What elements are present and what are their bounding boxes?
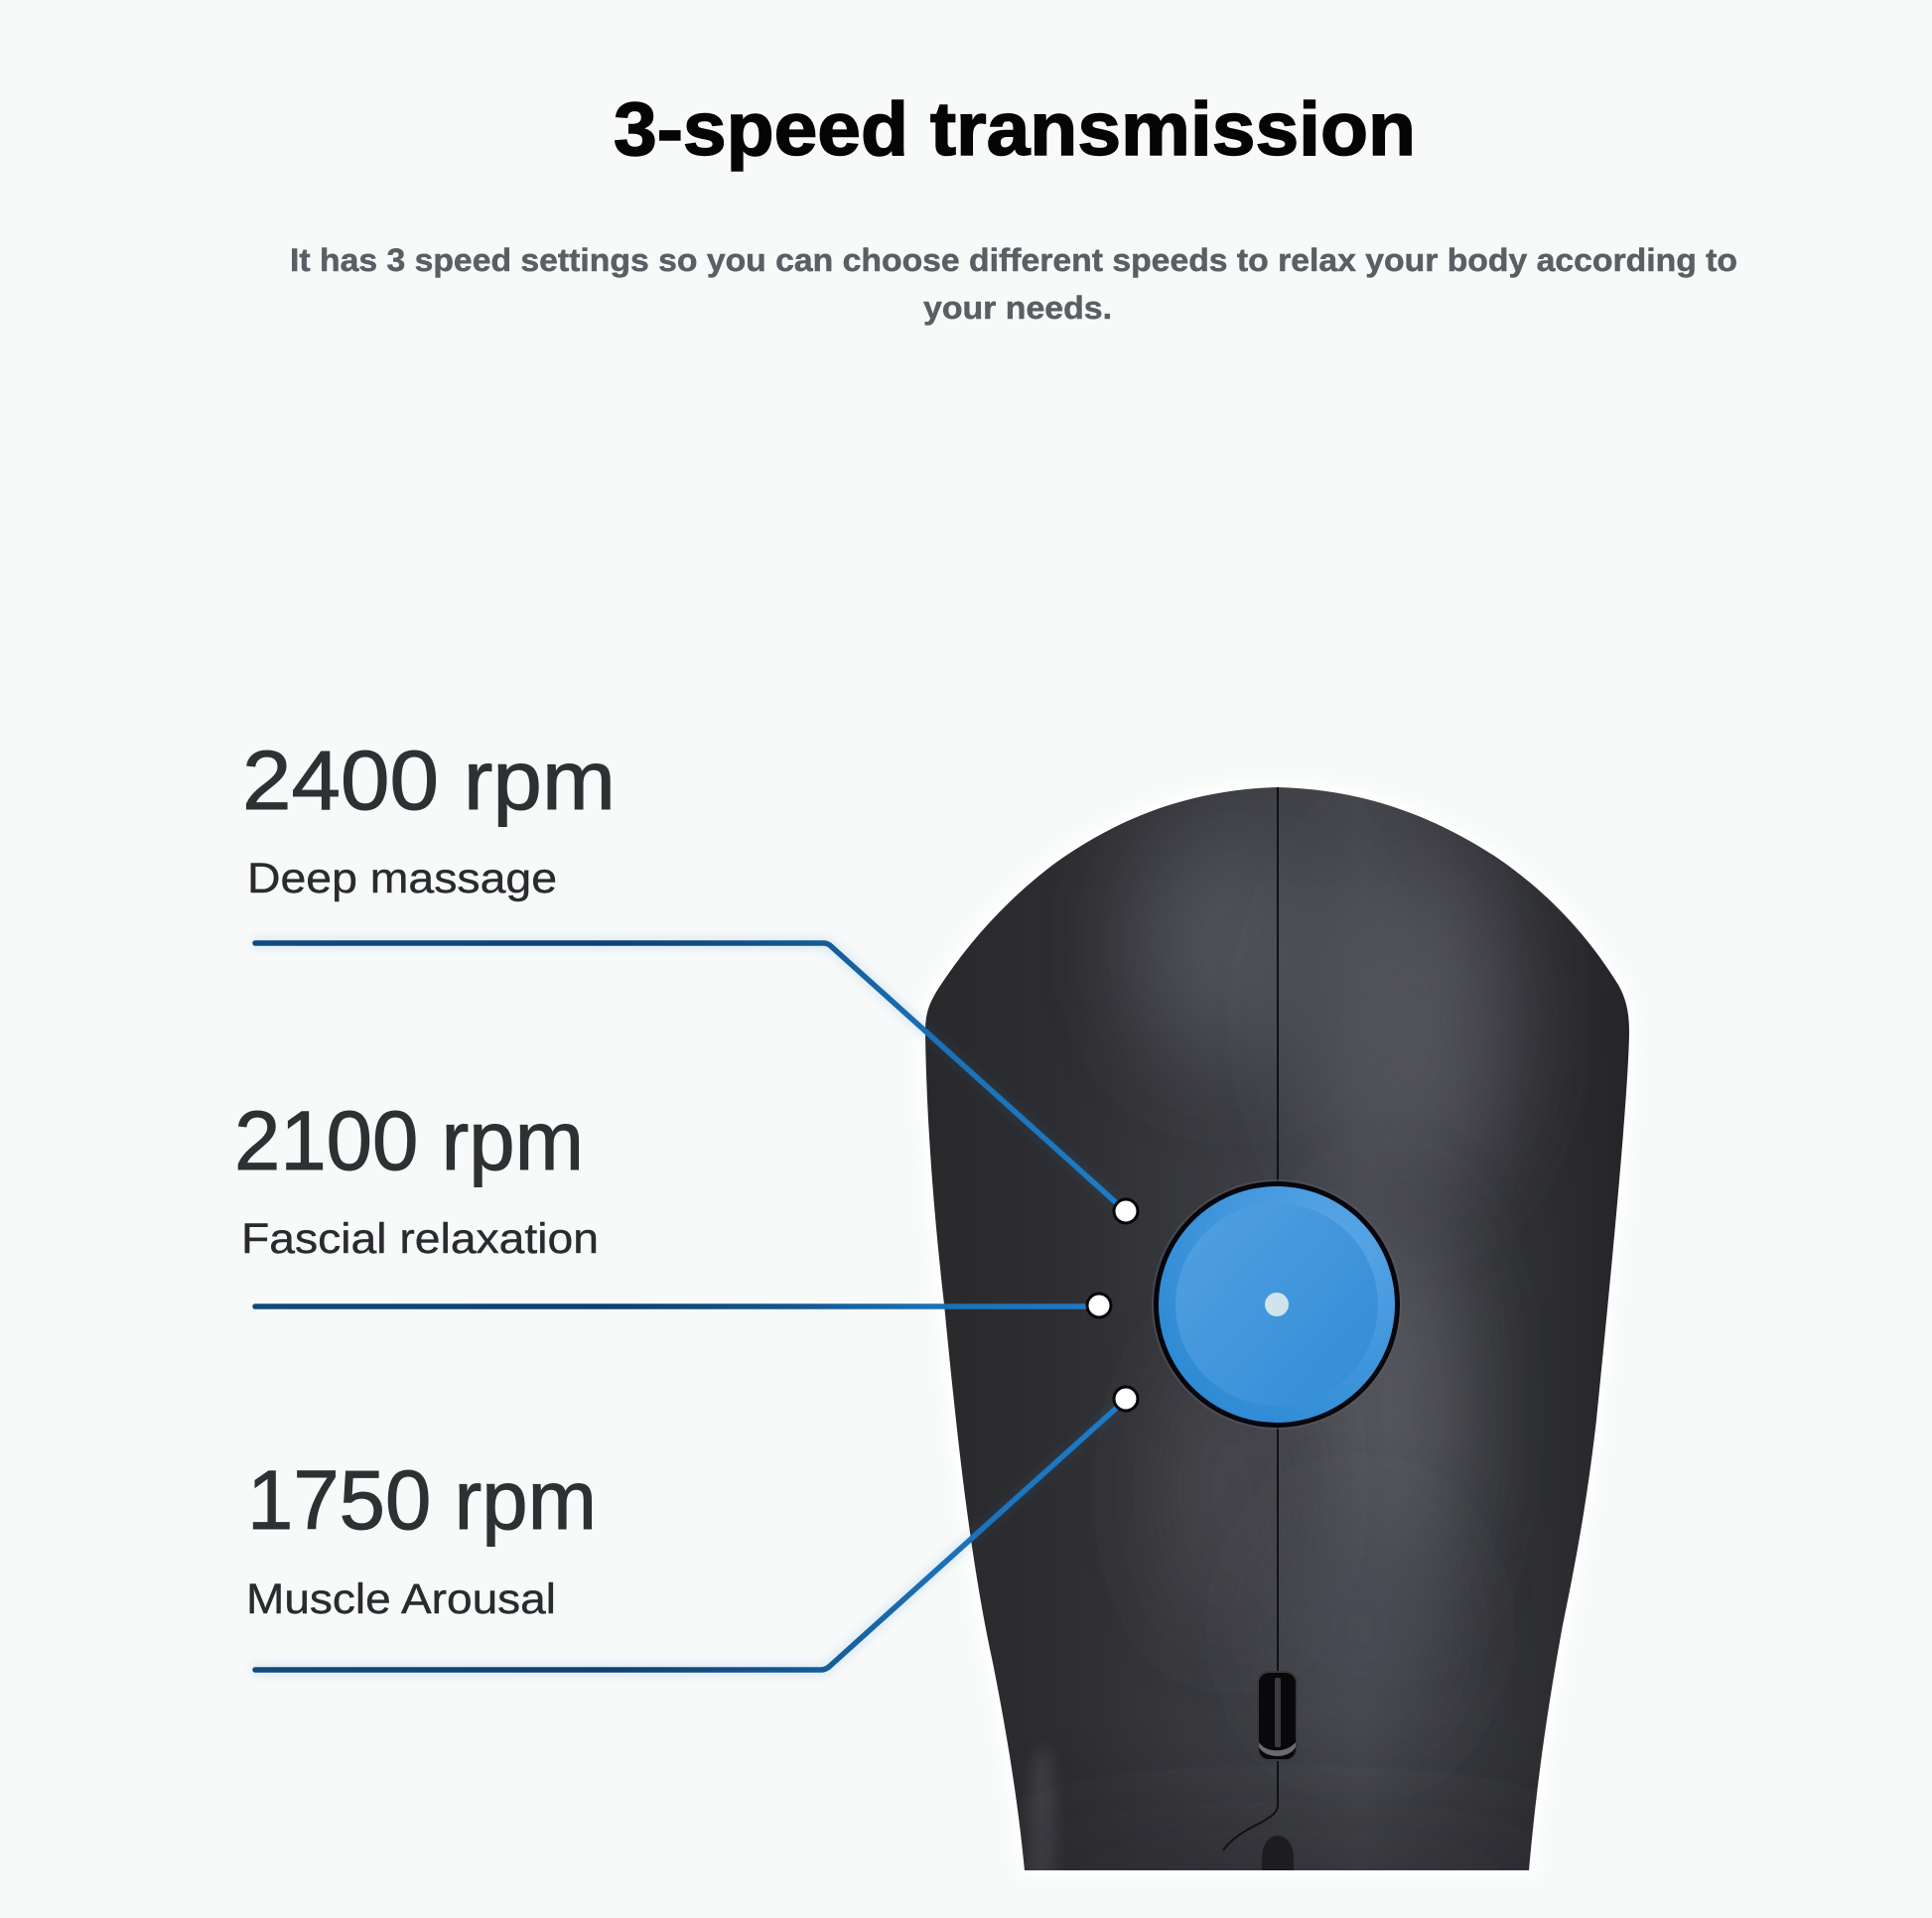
callout: 2400 rpm: 2400 rpm	[242, 734, 616, 827]
infographic canvas	[238, 99, 1736, 1870]
product: massage gun body	[925, 787, 1629, 1918]
title: 3-speed transmission	[614, 87, 1416, 172]
description text	[290, 242, 1737, 326]
callout: 2100 rpm: 2100 rpm	[234, 1094, 584, 1187]
callout: 1750 rpm	[246, 1387, 1138, 1670]
callout: 1750 rpm: 1750 rpm	[247, 1453, 597, 1547]
description text: your needs.	[923, 290, 1112, 326]
callout: 2100 rpm	[234, 1094, 1111, 1317]
speed control knob	[1152, 1179, 1402, 1430]
callout: 2400 rpm: Deep massage	[247, 855, 557, 902]
center seam	[1223, 787, 1278, 1850]
description text: It has 3 speed settings so you can choose different speeds to relax your body according to	[290, 242, 1737, 278]
knob center dot	[1265, 1293, 1289, 1316]
callout: 1750 rpm: Muscle Arousal	[246, 1576, 556, 1623]
callout: 2100 rpm: Fascial relaxation	[241, 1215, 599, 1263]
bottom button	[1262, 1836, 1294, 1870]
USB charging port	[1257, 1671, 1298, 1761]
callout: 2400 rpm	[242, 734, 1138, 1223]
